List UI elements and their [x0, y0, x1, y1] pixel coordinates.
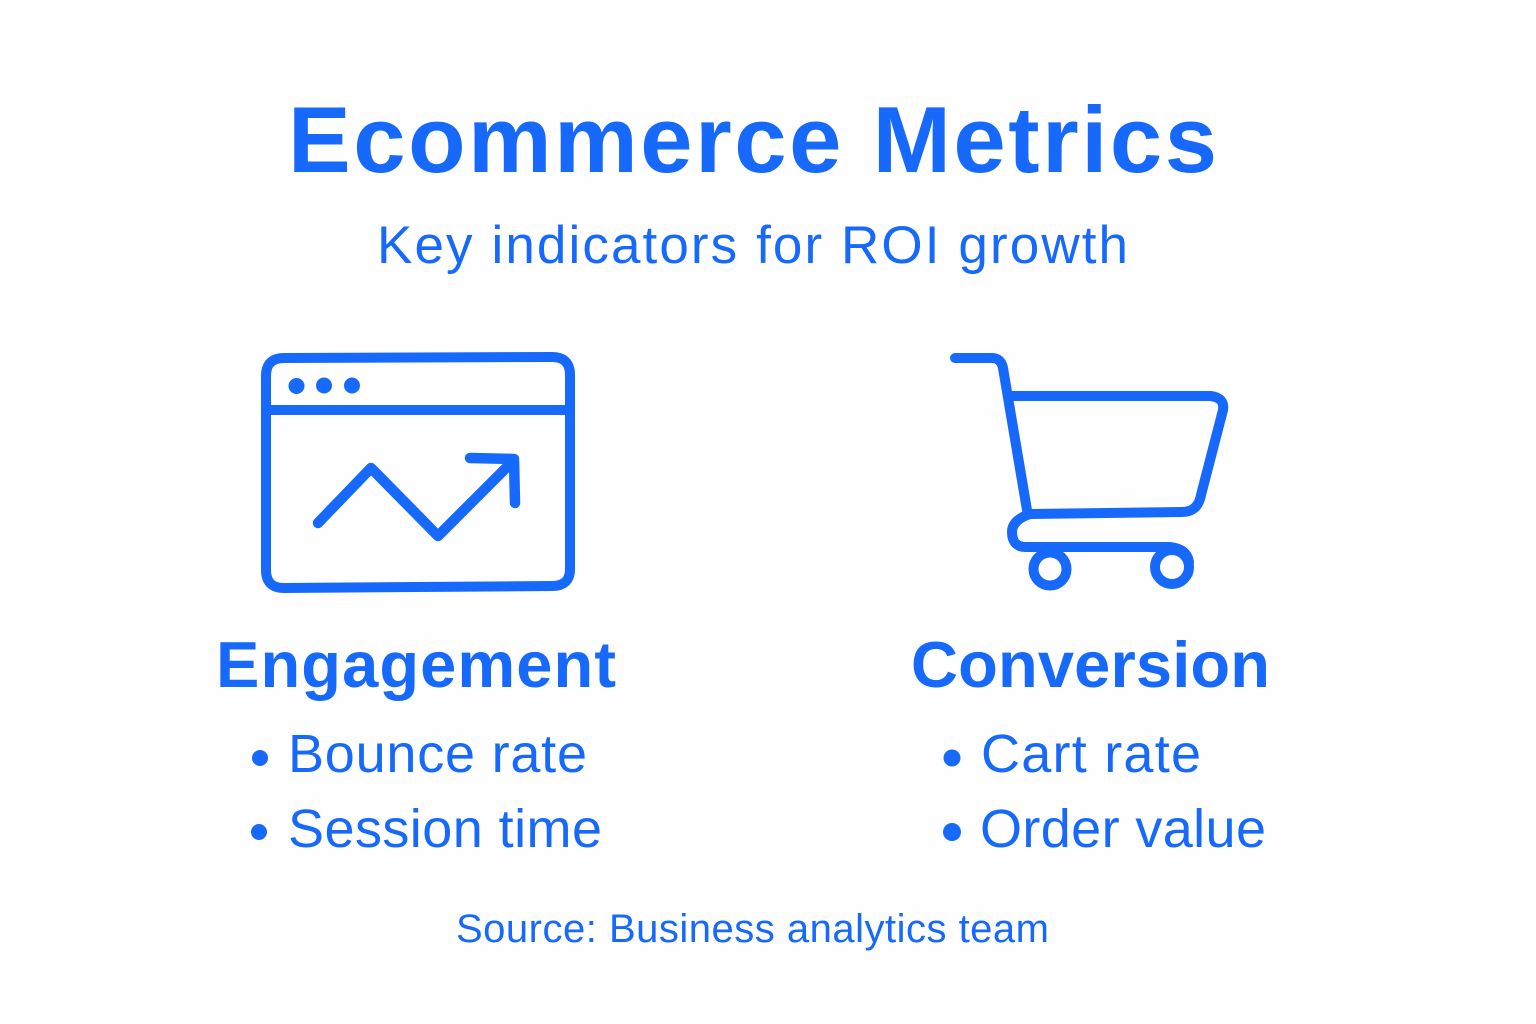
bullet list: conversion [943, 724, 1266, 859]
heading: conversion: Conversion [911, 628, 1270, 701]
panel: engagement [216, 357, 616, 859]
bullet list: engagement [251, 724, 602, 859]
source note: Source: Business analytics team [456, 907, 1049, 951]
icon: browser window with trend arrow [266, 357, 570, 588]
icon: shopping cart [955, 358, 1223, 586]
bullet list: engagement: Session time [288, 799, 602, 859]
panel: conversion [911, 358, 1270, 859]
bullet list: conversion: Order value [980, 799, 1266, 859]
title: Ecommerce Metrics [288, 87, 1217, 192]
heading: engagement: Engagement [216, 628, 616, 701]
subtitle: Key indicators for ROI growth [377, 216, 1128, 275]
bullet list: conversion: Cart rate [981, 724, 1201, 784]
bullet list: engagement: Bounce rate [288, 724, 587, 784]
